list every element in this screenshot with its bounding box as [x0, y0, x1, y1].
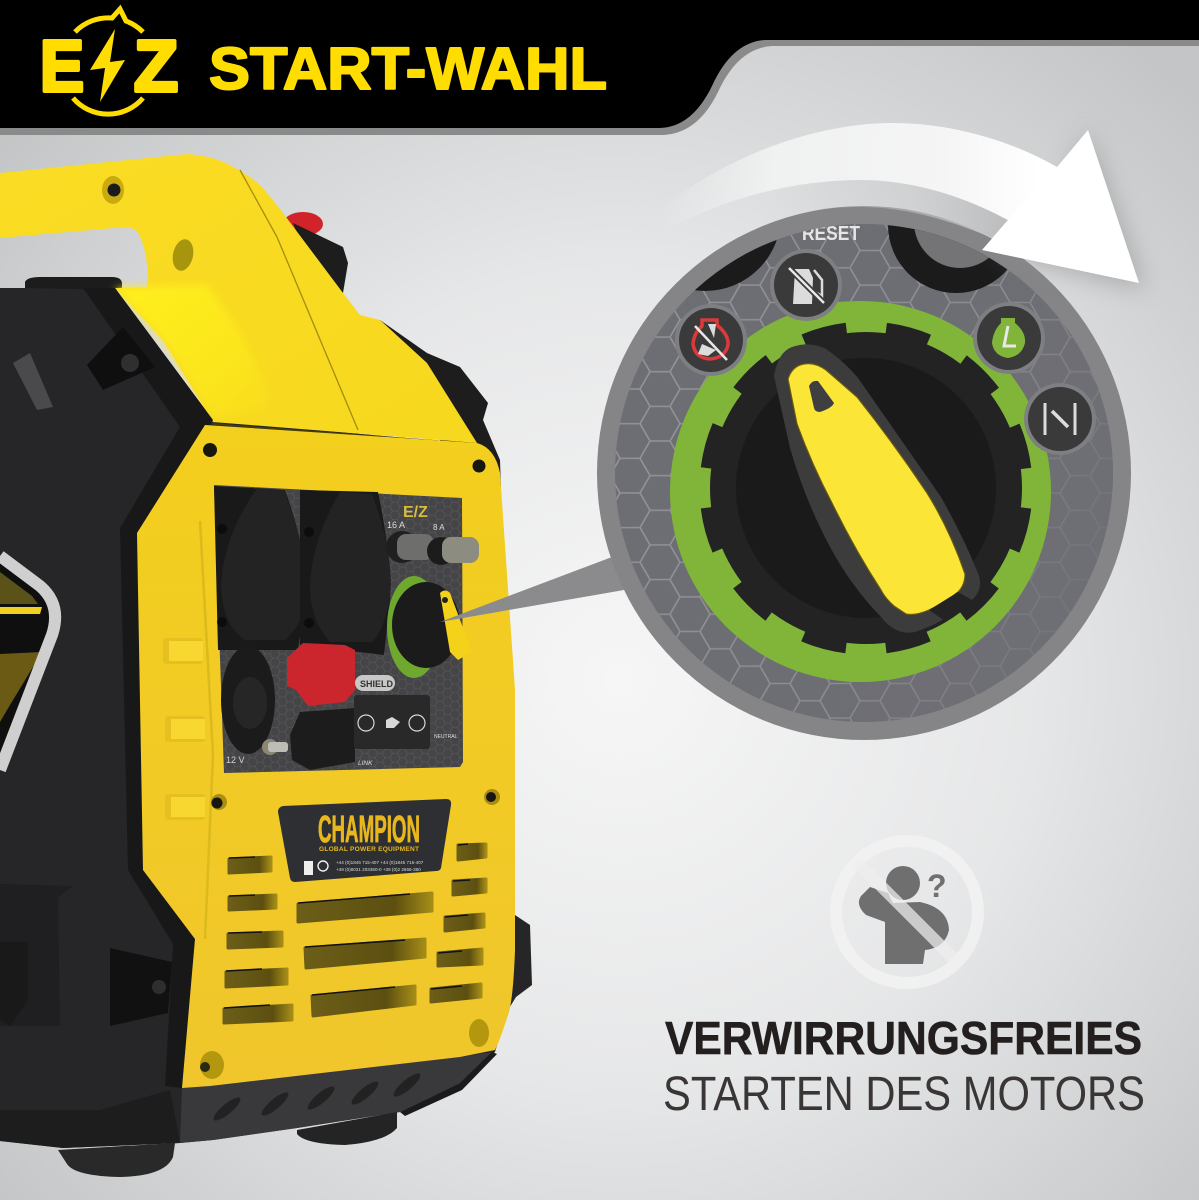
panel bevel [200, 521, 213, 939]
black body [0, 288, 532, 1148]
green ring [670, 301, 1051, 682]
socket 1 [214, 486, 307, 650]
header band [0, 0, 1199, 135]
rear black housing [380, 320, 515, 920]
dark band around panel [83, 288, 213, 1088]
logo: EZ: Z [134, 27, 178, 107]
vents [224, 844, 486, 1023]
panel breaker label 8A: 8 A [433, 523, 445, 532]
arrow shaft shadow [760, 180, 1008, 238]
icon: no confusion [836, 841, 978, 983]
hex plate [615, 224, 1113, 722]
icon: engine off [675, 304, 747, 376]
start dial [387, 576, 472, 678]
socket 2 [300, 490, 391, 655]
ground screw [262, 739, 288, 755]
panel breaker labels: 16 A [387, 520, 405, 530]
cover seam [240, 170, 358, 430]
red top button [283, 212, 323, 236]
handle and top cover [0, 154, 477, 443]
body details [0, 327, 180, 1148]
arrow head [982, 130, 1139, 283]
champion badge [278, 799, 451, 882]
champion badge: CHAMPION [318, 809, 420, 851]
control panel [214, 485, 479, 773]
panel EZ mark: E/Z [403, 504, 428, 521]
champion badge: GLOBAL POWER EQUIPMENT [319, 846, 419, 853]
feet [58, 1112, 397, 1177]
icon: engine on [973, 302, 1045, 374]
cover bright facet [115, 285, 267, 418]
arrow shaft [660, 123, 1057, 235]
breakers [386, 531, 479, 565]
logo: EZ [40, 9, 178, 114]
panel screws [200, 443, 500, 1079]
panel top seam [213, 424, 477, 444]
yellow front panel [137, 425, 515, 1088]
knob [687, 309, 1045, 667]
side handle opening [0, 556, 55, 770]
logo: EZ: E [40, 27, 84, 107]
button housing [293, 223, 348, 293]
red cover [287, 643, 355, 706]
title: START-WAHL [209, 36, 607, 102]
reset label: RESET [802, 223, 860, 245]
link label: LINK [358, 760, 373, 767]
shield badge [355, 675, 395, 691]
rotation arrow [660, 123, 1146, 290]
right button [888, 225, 1008, 293]
shield badge: SHIELD [360, 679, 394, 689]
icon: choke [1024, 383, 1096, 455]
panel tabs [163, 638, 205, 820]
champion badge: +49 (0)8031 203360-0 +39 (0)2 2666-380 [336, 867, 421, 872]
black outlet [290, 708, 355, 770]
champion badge: +44 (0)1845 715-407 +44 (0)1845 715-407 [336, 860, 424, 865]
generator [0, 154, 624, 1177]
magnifier [597, 206, 1131, 740]
12V label: 12 V [226, 755, 245, 765]
callout wedge [440, 557, 624, 622]
outer ring [597, 206, 1131, 740]
arrow head shadow [990, 130, 1146, 290]
icon: fuel off [770, 249, 842, 321]
icon: no confusion: ? [927, 868, 947, 904]
base [180, 1052, 497, 1143]
status display [354, 695, 430, 749]
handle screw [102, 176, 124, 204]
socket 12V [221, 646, 275, 754]
knob pointer [774, 344, 980, 633]
neutral label: NEUTRAL [434, 734, 458, 740]
handle base cap [25, 277, 122, 290]
handle hole [170, 237, 196, 273]
caption: bold line: VERWIRRUNGSFREIES [665, 1012, 1142, 1064]
left button [694, 240, 777, 291]
